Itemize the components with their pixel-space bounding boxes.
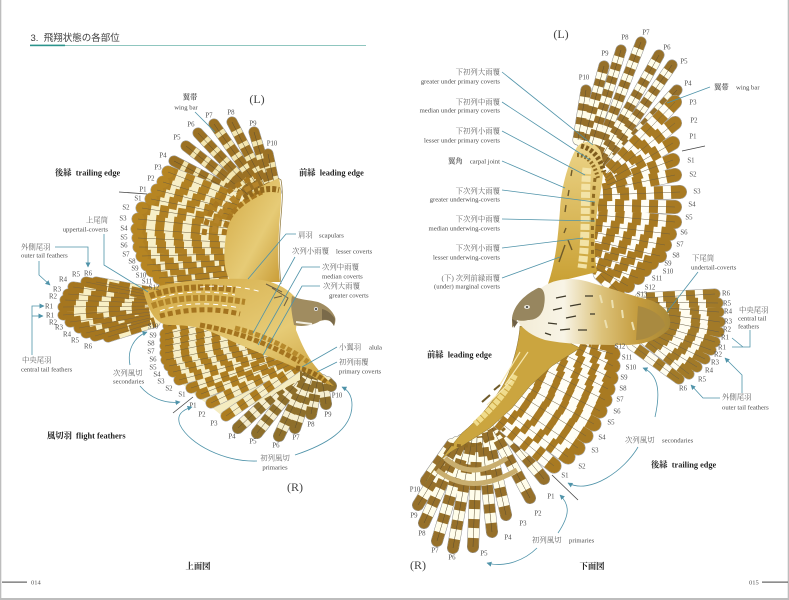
median underwing coverts label: [428, 214, 501, 232]
leader: carpal joint: [502, 161, 565, 188]
lower wing feather numbers: S4: [153, 372, 161, 378]
upper wing feather numbers: S12: [149, 284, 160, 292]
lower wing feather numbers: P2: [198, 412, 206, 418]
leader: greater coverts: [263, 286, 320, 355]
right page leader lines: [487, 72, 750, 565]
wing bar label: [174, 92, 199, 112]
left page leader lines: [32, 112, 352, 461]
upper wing feather numbers: P5: [173, 134, 181, 142]
arrow: secondaries down: [140, 386, 180, 402]
lower wing feather numbers: P8: [307, 422, 315, 428]
marginal coverts label: [434, 274, 501, 290]
left wing marker: (L): [249, 92, 265, 106]
page number 014: 014: [31, 580, 42, 586]
lower wing under feather numbers: P1: [547, 494, 555, 500]
secondaries label: secondaries: [113, 378, 145, 386]
median underwing coverts label: median underwing-coverts: [428, 226, 500, 232]
lower wing under feather numbers: P10: [410, 486, 421, 494]
lower wing feather numbers: S1: [178, 392, 186, 398]
lesser underwing coverts label: 下次列小雨覆: [456, 244, 501, 252]
lower wing under feather numbers: P6: [448, 554, 456, 562]
lower wing under feather numbers: S7: [616, 396, 624, 404]
lower wing under feather numbers: S10: [626, 364, 637, 372]
undertail coverts label: undertail-coverts: [691, 264, 737, 272]
tail under feather numbers: R1: [721, 334, 729, 342]
median under primary coverts label: median under primary coverts: [420, 108, 500, 114]
left page labels: [2, 92, 382, 586]
median coverts label: [322, 262, 363, 280]
greater under primary coverts label: [421, 68, 501, 86]
upper wing feather numbers: [119, 110, 278, 292]
median under primary coverts label: 下初列中雨覆: [456, 98, 501, 106]
secondaries label under: secondaries: [662, 438, 694, 444]
secondaries label: 次列風切: [113, 368, 143, 378]
lower wing under feather numbers: S11: [622, 354, 632, 362]
marginal coverts label: (under) marginal coverts: [434, 284, 500, 290]
upper wing under feathers: [578, 42, 680, 291]
lower wing under feather numbers: S8: [619, 386, 627, 392]
lower wing under feather numbers: P3: [519, 520, 527, 528]
upper wing under feather numbers: S1: [687, 158, 695, 164]
leader: uppertail coverts: [104, 234, 148, 292]
lower wing under feather numbers: S5: [607, 420, 615, 426]
lower wing under feather numbers: P9: [410, 512, 418, 520]
lesser underwing coverts label: [433, 244, 501, 262]
tail under feather numbers: R3: [724, 318, 733, 326]
lower wing feather numbers: S6: [149, 356, 157, 364]
body under: [518, 279, 670, 345]
upper wing under feather numbers: P1: [689, 134, 697, 140]
lower wing under feathers: [418, 340, 613, 548]
upper wing under feather numbers: S12: [645, 284, 656, 292]
body and coverts: [143, 279, 334, 386]
secondaries label under: [625, 436, 694, 444]
tail feather numbers: [45, 270, 93, 350]
median coverts label: 次列中雨覆: [322, 262, 360, 272]
upper wing feather numbers: S2: [122, 204, 130, 212]
greater coverts label: 次列大雨覆: [323, 282, 361, 290]
alula label: [339, 342, 382, 352]
lesser under primary coverts label: lesser under primary coverts: [424, 138, 500, 144]
tail under feather numbers: R5: [698, 376, 707, 384]
upper wing feather numbers: S7: [122, 252, 130, 258]
upper wing under feather numbers: P8: [621, 34, 629, 42]
upper wing feather numbers: S6: [120, 242, 128, 250]
upper wing under feather numbers: S5: [685, 214, 693, 222]
tail feather numbers: R6: [84, 344, 93, 350]
lower wing under feather numbers: P2: [534, 510, 542, 518]
upper wing feather numbers: S1: [134, 196, 142, 202]
uppertail coverts label: [63, 216, 109, 234]
lower wing feather numbers: S7: [147, 348, 155, 356]
lower wing feather numbers: P5: [249, 438, 257, 446]
lower wing under feather numbers: [410, 344, 637, 562]
arrow: secondaries up: [129, 332, 147, 365]
lesser coverts label: [292, 246, 373, 256]
flight feathers heading: 風切羽 flight feathers: [47, 430, 126, 440]
arrow: outer tail feathers to R3: [39, 261, 50, 285]
tail feather numbers: R2: [49, 320, 58, 326]
lower wing under feather numbers: P4: [504, 534, 512, 542]
leading edge heading under: 前縁 leading edge: [427, 350, 492, 360]
wing bar label right: [714, 82, 760, 92]
arrow: primaries left: [179, 407, 257, 461]
right page labels: [410, 27, 788, 586]
carpal joint label: [448, 156, 500, 166]
secondaries label: [113, 368, 145, 386]
upper wing under feather numbers: P6: [663, 44, 671, 52]
tail feather numbers: R1: [46, 312, 54, 320]
undertail coverts label: [691, 254, 737, 272]
lesser coverts label: 次列小雨覆: [292, 246, 330, 256]
page number 015: 015: [749, 580, 759, 586]
tail feather numbers: R4: [59, 276, 68, 284]
upper wing under feather numbers: P5: [680, 58, 688, 66]
tail under feather numbers: R5: [723, 300, 732, 308]
upper wing feather numbers: P10: [267, 140, 278, 148]
greater underwing coverts label: greater underwing-coverts: [430, 196, 500, 204]
trailing edge heading under: 後縁 trailing edge: [651, 460, 717, 470]
lower wing feather numbers: S9: [149, 332, 157, 340]
alula label: alula: [369, 344, 382, 352]
upper wing feather numbers: S11: [142, 278, 152, 286]
tail under feather numbers: [679, 290, 733, 392]
tail under feather numbers: R2: [723, 326, 732, 334]
tail under feather numbers: R4: [724, 308, 733, 316]
upper wing feather numbers: P4: [159, 152, 167, 160]
tail under feather numbers: R4: [705, 368, 714, 374]
tail feather numbers: R1: [45, 304, 53, 310]
scapulars label: scapulars: [319, 232, 344, 240]
lower wing under feather numbers: P7: [431, 548, 439, 554]
page number 015: [749, 580, 788, 586]
upper wing under feather numbers: P3: [689, 100, 697, 106]
under view caption: 下面図: [580, 561, 604, 571]
central tail feathers label right: [738, 306, 769, 330]
upper wing under feather numbers: P10: [579, 74, 590, 82]
under view bird illustration: [418, 42, 720, 548]
primaries label under: [532, 536, 595, 544]
greater under primary coverts label: greater under primary coverts: [421, 78, 500, 86]
marginal coverts label: (下) 次列前縁雨覆: [441, 274, 501, 282]
lower wing feather numbers: P3: [210, 420, 218, 428]
upper view caption: 上面図: [186, 561, 210, 571]
bracket: central tail feathers: [732, 330, 750, 347]
outer tail feathers label: outer tail feathers: [21, 252, 68, 260]
leader: lesser under primary coverts: [502, 131, 585, 175]
arrow: primaries right: [295, 387, 352, 455]
upper wing under feather numbers: S11: [652, 276, 662, 282]
outer tail feathers label: 外側尾羽: [21, 242, 51, 252]
lower wing under feather numbers: S6: [613, 408, 621, 416]
upper wing under feather numbers: [579, 30, 701, 298]
upper wing feather numbers: P9: [249, 120, 257, 128]
arrow: outer tail feathers to R6: [55, 247, 88, 267]
lower wing feather numbers: P4: [228, 434, 236, 440]
lower wing feather numbers: P6: [272, 442, 280, 450]
tail under feather numbers: R6: [679, 386, 688, 392]
upper wing feather numbers: S8: [128, 258, 136, 266]
scapulars label: 肩羽: [298, 230, 313, 240]
leader: median underwing coverts: [502, 219, 595, 221]
lower wing under feather numbers: P5: [480, 550, 488, 558]
leader: greater underwing coverts: [502, 190, 595, 202]
upper wing feather numbers: S10: [136, 272, 147, 280]
primaries label under: primaries: [569, 538, 595, 544]
upper wing feather numbers: P6: [187, 122, 195, 128]
greater under primary coverts label: 下初列大雨覆: [456, 68, 501, 76]
primary coverts label: primary coverts: [339, 368, 382, 376]
central tail feathers label: central tail feathers: [21, 366, 73, 374]
lower wing under feather numbers: S9: [620, 374, 628, 382]
tail feather numbers: R5: [72, 272, 81, 278]
carpal joint label: 翼角: [448, 156, 463, 166]
head under: [512, 288, 545, 328]
greater coverts label: greater coverts: [329, 292, 369, 300]
upper wing under feather numbers: S3: [693, 188, 701, 196]
leader: lesser underwing coverts: [502, 238, 583, 248]
primaries label under: 初列風切: [532, 536, 562, 544]
upper wing feather numbers: P1: [139, 186, 147, 194]
lower wing feather numbers: S8: [147, 340, 155, 348]
central tail feathers label right: feathers: [738, 324, 760, 330]
title: 3. 飛翔状態の各部位: [30, 32, 120, 44]
upper wing under feather numbers: S4: [688, 202, 696, 208]
lower wing under feather numbers: S12: [615, 344, 626, 350]
upper wing under feather numbers: P4: [684, 80, 692, 88]
divider mark: upper wing right: [682, 146, 705, 151]
upper wing coverts: [204, 176, 282, 284]
divider mark: upper wing: [119, 192, 147, 194]
tail under feather numbers: R3: [711, 360, 720, 366]
secondaries label under: 次列風切: [625, 436, 655, 444]
lesser under primary coverts label: 下初列小雨覆: [456, 126, 501, 136]
page number 014: [2, 580, 42, 586]
upper wing under feather numbers: S13: [637, 292, 648, 298]
lower wing under feather numbers: S1: [561, 472, 569, 480]
primaries label: [260, 454, 290, 472]
lower wing feather numbers: S3: [157, 378, 165, 386]
leading edge heading: 前縁 leading edge: [299, 168, 364, 178]
right wing marker under: (R): [410, 558, 426, 572]
central tail feathers label: 中央尾羽: [22, 356, 52, 364]
arrow: secondaries down right: [568, 447, 638, 486]
right wing marker: (R): [287, 480, 303, 494]
arrow: central tail feathers to lower R1: [32, 315, 43, 317]
lesser under primary coverts label: [424, 126, 501, 144]
arrow: outer tail feathers to R2: [725, 358, 742, 393]
lower wing feather numbers: P9: [324, 412, 332, 418]
uppertail coverts label: 上尾筒: [86, 216, 109, 224]
upper wing feathers: [136, 122, 276, 286]
lesser coverts label: lesser coverts: [336, 248, 373, 256]
leader: scapulars: [248, 234, 296, 279]
leader: wing bar right: [667, 87, 710, 103]
leader: median under primary coverts: [502, 102, 590, 160]
median under primary coverts label: [420, 98, 501, 114]
upper wing feather numbers: S9: [131, 266, 139, 272]
median coverts label: median coverts: [322, 274, 363, 280]
lower wing under feather numbers: S3: [591, 448, 599, 454]
central tail feathers label right: 中央尾羽: [739, 306, 769, 314]
lesser underwing coverts label: lesser underwing-coverts: [433, 254, 500, 262]
upper wing under feather numbers: S9: [664, 260, 672, 268]
arrow: secondaries up right: [643, 368, 658, 417]
carpal joint label: carpal joint: [470, 158, 500, 166]
outer tail feathers label right: outer tail feathers: [722, 404, 769, 412]
trailing edge heading: 後縁 trailing edge: [55, 168, 121, 178]
greater underwing coverts label: [430, 186, 501, 204]
leader: alula: [302, 347, 337, 367]
tail feather numbers: R3: [55, 324, 64, 332]
lower wing under feather numbers: P8: [418, 530, 426, 538]
upper wing feather numbers: S5: [120, 234, 128, 242]
lower wing feather numbers: S10: [148, 324, 159, 330]
leader: undertail coverts: [667, 272, 698, 312]
divider mark: lower wing right: [552, 475, 578, 500]
wing bar label: 翼帯: [183, 92, 198, 102]
leader: primary coverts: [317, 362, 337, 372]
primary coverts label: 初列雨覆: [339, 358, 369, 366]
undertail coverts label: 下尾筒: [692, 254, 715, 262]
head: [291, 296, 335, 326]
greater coverts label: [323, 282, 369, 300]
tail feather numbers: R5: [71, 338, 80, 344]
arrow: central tail feathers to R1: [32, 306, 44, 355]
tail feather numbers: R2: [49, 294, 58, 300]
upper wing under feather numbers: P7: [642, 30, 650, 36]
lower wing feather numbers: P7: [292, 434, 300, 442]
lower wing feather numbers: [147, 324, 343, 450]
upper wing feather numbers: P8: [227, 110, 235, 116]
lower wing under feather numbers: S4: [598, 434, 606, 442]
leader: wing bar: [195, 112, 215, 132]
upper wing under feather numbers: P9: [601, 50, 609, 58]
outer tail feathers label right: [722, 392, 769, 412]
underwing coverts upper: [548, 142, 604, 284]
upper wing under feather numbers: S6: [680, 230, 688, 236]
tail: [63, 282, 155, 337]
upper wing under feather numbers: P2: [690, 118, 698, 124]
lower wing feather numbers: P10: [332, 392, 343, 400]
left wing marker under: (L): [553, 27, 569, 41]
lower wing feather numbers: S2: [165, 386, 173, 392]
upper wing under feather numbers: S2: [689, 172, 697, 178]
lower wing under feather numbers: S2: [578, 464, 586, 470]
wing bar label right: 翼帯: [714, 82, 729, 92]
lower wing feather numbers: P1: [189, 402, 197, 410]
upper wing under feather numbers: S8: [672, 252, 680, 260]
arrow: primaries up right: [558, 495, 567, 533]
tail under feather numbers: R1: [718, 344, 726, 352]
outer tail feathers label right: 外側尾羽: [722, 392, 752, 402]
arrow: outer tail feathers to R6: [691, 385, 720, 398]
scapulars label: [298, 230, 344, 240]
tail under feather numbers: R6: [722, 290, 731, 298]
uppertail coverts label: uppertail-coverts: [63, 226, 108, 234]
wing bar label: wing bar: [174, 104, 199, 112]
upper wing feather numbers: P3: [154, 164, 162, 172]
alula label: 小翼羽: [339, 342, 361, 352]
tail feather numbers: R4: [63, 332, 72, 338]
upper view bird illustration: [63, 122, 335, 436]
outer tail feathers label: [21, 242, 68, 260]
greater underwing coverts label: 下次列大雨覆: [456, 186, 501, 196]
wing bar label right: wing bar: [736, 84, 760, 92]
leader: greater under primary coverts: [502, 72, 593, 145]
upper wing feather numbers: P2: [147, 176, 155, 182]
lower wing feathers: [165, 315, 331, 436]
leader: median coverts: [258, 267, 320, 345]
median underwing coverts label: 下次列中雨覆: [456, 214, 501, 224]
arrow: primaries down right: [487, 548, 537, 565]
lower wing feather numbers: S5: [149, 364, 157, 372]
leader: lesser coverts: [253, 257, 295, 333]
tail under feather numbers: R2: [714, 352, 723, 358]
central tail feathers label: [21, 356, 73, 374]
divider mark: lower wing: [173, 397, 193, 413]
tail feather numbers: R6: [84, 270, 93, 278]
primaries label: 初列風切: [260, 454, 290, 462]
leader: marginal coverts: [502, 257, 560, 278]
underwing coverts lower: [424, 326, 580, 486]
upper wing under feather numbers: S10: [663, 268, 674, 276]
upper wing feather numbers: P7: [205, 112, 213, 120]
upper wing feather numbers: S3: [119, 216, 127, 222]
primary coverts label: [339, 358, 382, 376]
upper wing feather numbers: S4: [120, 226, 128, 232]
tail feather numbers: R3: [53, 286, 62, 294]
upper wing under feather numbers: S7: [676, 242, 684, 248]
primaries label: primaries: [262, 464, 288, 472]
central tail feathers label right: central tail: [738, 316, 767, 322]
tail under: [632, 294, 720, 379]
